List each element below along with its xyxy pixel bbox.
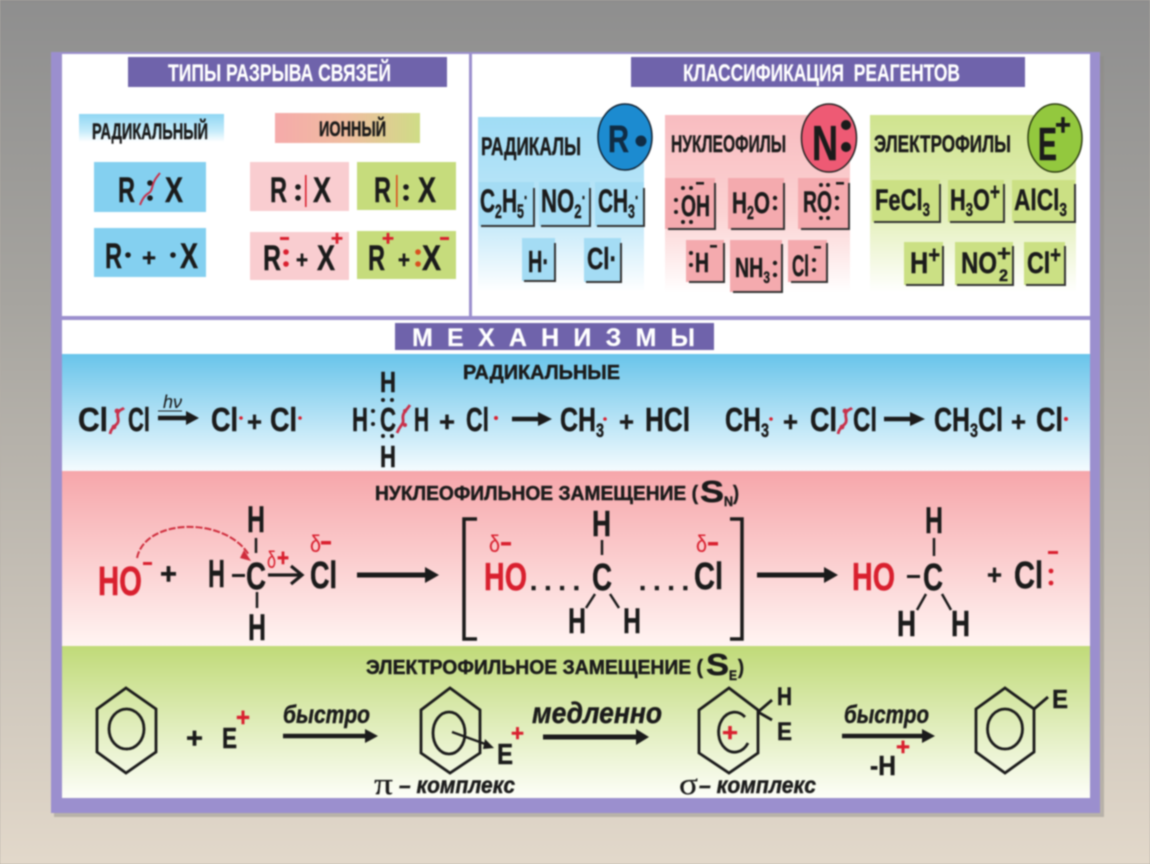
transition state in brackets: H bbox=[568, 602, 586, 641]
reaction: methane abstraction: H bbox=[380, 367, 396, 399]
box: ionic bond, green bbox=[357, 162, 456, 210]
chip: C2H5: 5 bbox=[517, 202, 524, 223]
chip: NH3: 3 bbox=[763, 268, 770, 287]
panel: electrophiles bbox=[870, 104, 1082, 293]
heading: radical: РАДИКАЛЬНЫЕ bbox=[463, 362, 620, 384]
arrow: slow: медленно bbox=[532, 697, 662, 730]
reaction: chlorine initiation bbox=[78, 392, 302, 438]
reactant: methyl chloride bbox=[208, 499, 337, 648]
chip: H3O+: O bbox=[973, 184, 990, 217]
chip: RO: RO bbox=[803, 186, 832, 219]
icon: nucleophile circle: N bbox=[812, 117, 838, 171]
reaction: methane abstraction: HCl bbox=[645, 401, 690, 438]
arrow: fast, proton loss: -H bbox=[870, 750, 896, 781]
panel: bond cleavage types bbox=[79, 57, 456, 280]
box: ionic bond, pink: R bbox=[270, 171, 287, 210]
box: ionic products, pink: X bbox=[317, 239, 335, 278]
reaction: methane abstraction: + bbox=[619, 406, 634, 437]
label: pi complex bbox=[374, 766, 515, 801]
arrow: slow bbox=[532, 697, 662, 745]
reactant: methyl chloride: H bbox=[247, 499, 265, 540]
reaction: chain propagation: Cl bbox=[853, 401, 877, 438]
panel: electrophilic substitution bbox=[62, 646, 1090, 801]
benzene ring bbox=[97, 688, 156, 773]
chip: C2H5 bbox=[479, 182, 534, 226]
product: chloride ion: + bbox=[987, 559, 1002, 590]
panel: radical mechanism bbox=[62, 354, 1090, 474]
heading: mechanisms: МЕХАНИЗМЫ bbox=[412, 324, 695, 352]
chip: chloride: Cl bbox=[792, 250, 809, 283]
reaction: chlorine initiation: hν bbox=[163, 392, 182, 412]
chip: FeCl3: FeCl bbox=[875, 184, 940, 217]
chip: C2H5: H bbox=[502, 183, 517, 219]
transition state in brackets: HO bbox=[484, 556, 527, 599]
chip: hydride bbox=[686, 240, 724, 282]
box: radical bond bbox=[94, 162, 206, 212]
reaction: methane abstraction: CH bbox=[560, 401, 608, 438]
panel: electrophiles: ЭЛЕКТРОФИЛЫ bbox=[874, 131, 1011, 158]
box: ionic products, green bbox=[357, 228, 456, 279]
pi complex: + bbox=[511, 720, 524, 746]
chip: H+: H bbox=[910, 247, 932, 280]
chip: RO bbox=[798, 178, 849, 229]
subheading: ionic bbox=[275, 113, 420, 143]
reaction: chlorine initiation: Cl bbox=[128, 401, 150, 438]
product: methanol: H bbox=[897, 603, 916, 644]
box: ionic bond, pink: X bbox=[313, 171, 331, 210]
subheading: radical: РАДИКАЛЬНЫЙ bbox=[92, 119, 208, 144]
chip: CH3: CH bbox=[598, 183, 644, 219]
box: ionic products, pink: + bbox=[331, 228, 343, 250]
arrow: fast: быстро bbox=[283, 701, 370, 729]
product: chloride ion: Cl bbox=[1014, 555, 1043, 597]
reaction: methane abstraction: C bbox=[380, 401, 396, 438]
box: ionic bond, green: X bbox=[418, 171, 436, 210]
reactant: methyl chloride: Cl bbox=[310, 555, 337, 597]
chip: C2H5: · bbox=[524, 188, 528, 209]
box: radical products: R bbox=[105, 237, 122, 276]
chip: hydride: H bbox=[695, 247, 709, 278]
chip: Cl+: + bbox=[1050, 242, 1061, 269]
chip: AlCl3: AlCl bbox=[1014, 184, 1074, 217]
reaction: chlorine initiation: Cl bbox=[270, 401, 297, 438]
chip: OH bbox=[665, 178, 715, 229]
reaction: methane abstraction: H bbox=[380, 439, 396, 474]
chip: Cl radical: Cl· bbox=[587, 241, 617, 276]
chip: NH3: NH bbox=[735, 252, 775, 283]
transition state in brackets: δ bbox=[696, 531, 707, 558]
product: chloride ion bbox=[987, 551, 1058, 597]
reactant: hydroxide: HO bbox=[98, 558, 142, 604]
label: pi complex: π bbox=[374, 766, 393, 801]
product: methanol: H bbox=[925, 500, 943, 541]
chip: NO2+: 2 bbox=[999, 266, 1008, 285]
reactant: methyl chloride: C bbox=[246, 556, 266, 598]
box: radical products: + bbox=[142, 245, 156, 272]
panel: radicals bbox=[478, 104, 652, 292]
panel: radicals: РАДИКАЛЫ bbox=[481, 133, 581, 161]
chip: H2O: H bbox=[732, 187, 754, 220]
panel: nucleophiles: НУКЛЕОФИЛЫ bbox=[671, 131, 786, 158]
transition state in brackets: δ bbox=[489, 531, 500, 558]
chip: NO2+ bbox=[955, 241, 1013, 285]
subheading: radical bbox=[79, 114, 224, 144]
chip: CH3: · bbox=[635, 188, 639, 209]
chip: OH: OH bbox=[681, 190, 710, 223]
reaction: methane abstraction: 3 bbox=[596, 421, 604, 442]
heading: SN: ) bbox=[733, 483, 739, 505]
arrow: fast, proton loss bbox=[842, 701, 935, 781]
chip: AlCl3: 3 bbox=[1059, 200, 1067, 220]
chip: H3O+ bbox=[948, 179, 1004, 222]
reactant: methyl chloride: + bbox=[277, 545, 289, 572]
pi complex bbox=[421, 688, 524, 773]
chip: H+: + bbox=[928, 242, 940, 269]
arrow: fast, proton loss: + bbox=[896, 734, 910, 761]
chip: NO2: 2 bbox=[574, 202, 582, 223]
chip: Cl radical bbox=[584, 238, 621, 282]
label: sigma complex bbox=[679, 766, 816, 801]
chip: C2H5: C bbox=[480, 183, 503, 219]
box: ionic bond, pink bbox=[250, 162, 349, 211]
electrophile: + bbox=[236, 702, 250, 732]
chip: H radical: H· bbox=[528, 244, 549, 279]
reaction: chain propagation: Cl bbox=[1036, 401, 1063, 438]
chip: H3O+: 3 bbox=[966, 200, 973, 220]
chip: H2O bbox=[728, 178, 784, 229]
reaction: chlorine initiation: Cl bbox=[78, 401, 108, 438]
chip: H3O+: + bbox=[990, 179, 1000, 206]
icon: electrophile circle bbox=[1028, 104, 1082, 172]
label: sigma complex: σ bbox=[679, 766, 698, 801]
product: methanol: HO bbox=[852, 556, 895, 599]
chip: chloride bbox=[788, 240, 827, 283]
icon: radical circle: R bbox=[608, 119, 629, 161]
box: ionic products, pink: + bbox=[296, 247, 308, 274]
arrow: to transition state bbox=[357, 567, 439, 583]
transition state in brackets: H bbox=[592, 503, 611, 544]
electrophile: + bbox=[186, 723, 203, 755]
box: ionic products, green: R bbox=[368, 239, 385, 278]
subheading: ionic: ИОННЫЙ bbox=[319, 117, 386, 141]
heading: SE: S bbox=[706, 647, 729, 682]
heading: bond cleavage types: ТИПЫ РАЗРЫВА СВЯЗЕЙ bbox=[168, 59, 391, 87]
label: pi complex: – комплекс bbox=[399, 772, 515, 798]
reaction: chain propagation: CH bbox=[725, 401, 773, 438]
box: ionic products, pink bbox=[250, 228, 349, 280]
chip: Cl+ bbox=[1024, 242, 1065, 285]
pi complex: E bbox=[497, 739, 513, 771]
transition state in brackets: .... bbox=[530, 566, 580, 596]
box: ionic products, green: + bbox=[398, 247, 410, 274]
transition state in brackets: H bbox=[623, 602, 641, 641]
arrow: fast bbox=[283, 701, 378, 743]
reaction: chain propagation bbox=[725, 401, 1068, 442]
icon: radical circle bbox=[598, 104, 652, 170]
chip: CH3: 3 bbox=[628, 202, 635, 223]
transition state in brackets: C bbox=[592, 557, 612, 599]
reaction: methane abstraction: H bbox=[352, 401, 368, 438]
chip: H3O+: H bbox=[950, 184, 972, 217]
chip: NH3 bbox=[730, 240, 782, 292]
reaction: methane abstraction: H bbox=[414, 401, 429, 438]
reaction: methane abstraction: + bbox=[439, 406, 455, 437]
box: ionic products, pink: R bbox=[263, 239, 281, 278]
reaction: chlorine initiation: + bbox=[247, 406, 262, 437]
reactant: hydroxide: + bbox=[160, 558, 177, 591]
reaction: chlorine initiation: Cl bbox=[211, 401, 238, 438]
reaction: chain propagation: 3 bbox=[761, 421, 769, 442]
transition state in brackets: Cl bbox=[694, 556, 723, 598]
box: radical products: X bbox=[180, 237, 198, 276]
heading: reagent classification: КЛАССИФИКАЦИЯ РЕАГЕНТОВ bbox=[683, 60, 960, 87]
reaction: chain propagation: + bbox=[783, 406, 798, 437]
box: radical bond: X bbox=[165, 171, 183, 210]
arrow: fast, proton loss: быстро bbox=[844, 701, 929, 729]
transition state in brackets: .... bbox=[639, 566, 689, 596]
chip: NO2: NO bbox=[541, 183, 589, 219]
sigma complex: H bbox=[777, 683, 792, 711]
reaction: chain propagation: Cl bbox=[978, 401, 1003, 438]
arrow: to products bbox=[757, 567, 838, 583]
chip: H2O: 2 bbox=[747, 203, 754, 223]
reaction: chain propagation: CH bbox=[934, 401, 982, 438]
product: substituted benzene bbox=[976, 684, 1068, 773]
chip: C2H5: 2 bbox=[495, 202, 502, 223]
box: radical products bbox=[94, 228, 206, 277]
chip: NO2+: NO bbox=[961, 247, 997, 280]
label: sigma complex: – комплекс bbox=[699, 772, 816, 798]
heading: SN: S bbox=[700, 474, 724, 509]
sigma complex: + bbox=[722, 719, 738, 747]
reaction: chain propagation: Cl bbox=[810, 401, 837, 438]
reaction: methane abstraction bbox=[352, 367, 690, 474]
reactant: methyl chloride: δ bbox=[310, 531, 321, 558]
chip: H radical bbox=[522, 238, 555, 281]
heading: SE: E bbox=[729, 667, 737, 683]
reaction: chain propagation: 3 bbox=[970, 421, 978, 442]
electrophile: E bbox=[222, 723, 237, 755]
heading: SN: N bbox=[724, 493, 733, 509]
box: ionic products, green: + bbox=[382, 228, 394, 250]
reactant: methyl chloride: H bbox=[248, 607, 266, 648]
heading: SN bbox=[375, 474, 739, 509]
reactant: methyl chloride: H bbox=[208, 553, 225, 596]
product: methanol: H bbox=[951, 603, 970, 644]
heading: SE: ЭЛЕКТРОФИЛЬНОЕ ЗАМЕЩЕНИЕ ( bbox=[366, 657, 703, 679]
reactant: methyl chloride: δ bbox=[267, 547, 276, 574]
icon: electrophile circle: E bbox=[1038, 118, 1057, 170]
icon: nucleophile circle bbox=[802, 104, 856, 172]
chip: NO2+: + bbox=[997, 241, 1011, 266]
product: methanol bbox=[852, 500, 970, 644]
panel: nucleophiles bbox=[665, 104, 856, 293]
product: substituted benzene: E bbox=[1052, 684, 1068, 714]
electrophile bbox=[186, 702, 250, 755]
sigma complex bbox=[699, 683, 792, 773]
heading: SN: НУКЛЕОФИЛЬНОЕ ЗАМЕЩЕНИЕ ( bbox=[375, 483, 698, 505]
chip: NO2: · bbox=[582, 188, 586, 209]
transition state in brackets bbox=[464, 503, 742, 641]
heading: SE: ) bbox=[738, 657, 744, 679]
sigma complex: E bbox=[777, 718, 792, 746]
icon: electrophile circle: + bbox=[1055, 109, 1071, 142]
reaction: methane abstraction: Cl bbox=[466, 401, 489, 438]
reaction: chain propagation: + bbox=[1011, 406, 1026, 437]
box: ionic bond, green: R bbox=[374, 171, 391, 210]
chip: H+ bbox=[904, 242, 943, 285]
product: methanol: C bbox=[923, 557, 943, 599]
heading: SE bbox=[366, 647, 744, 683]
chip: Cl+: Cl bbox=[1027, 247, 1057, 280]
arrow: nucleophile attack bbox=[137, 527, 249, 558]
box: ionic products, green: X bbox=[422, 239, 442, 278]
box: radical bond: R bbox=[118, 171, 135, 210]
panel: reagent classification bbox=[478, 57, 1082, 293]
chip: H2O: O bbox=[754, 187, 770, 220]
chip: FeCl3: 3 bbox=[923, 200, 930, 220]
panel: nucleophilic substitution bbox=[62, 471, 1090, 648]
